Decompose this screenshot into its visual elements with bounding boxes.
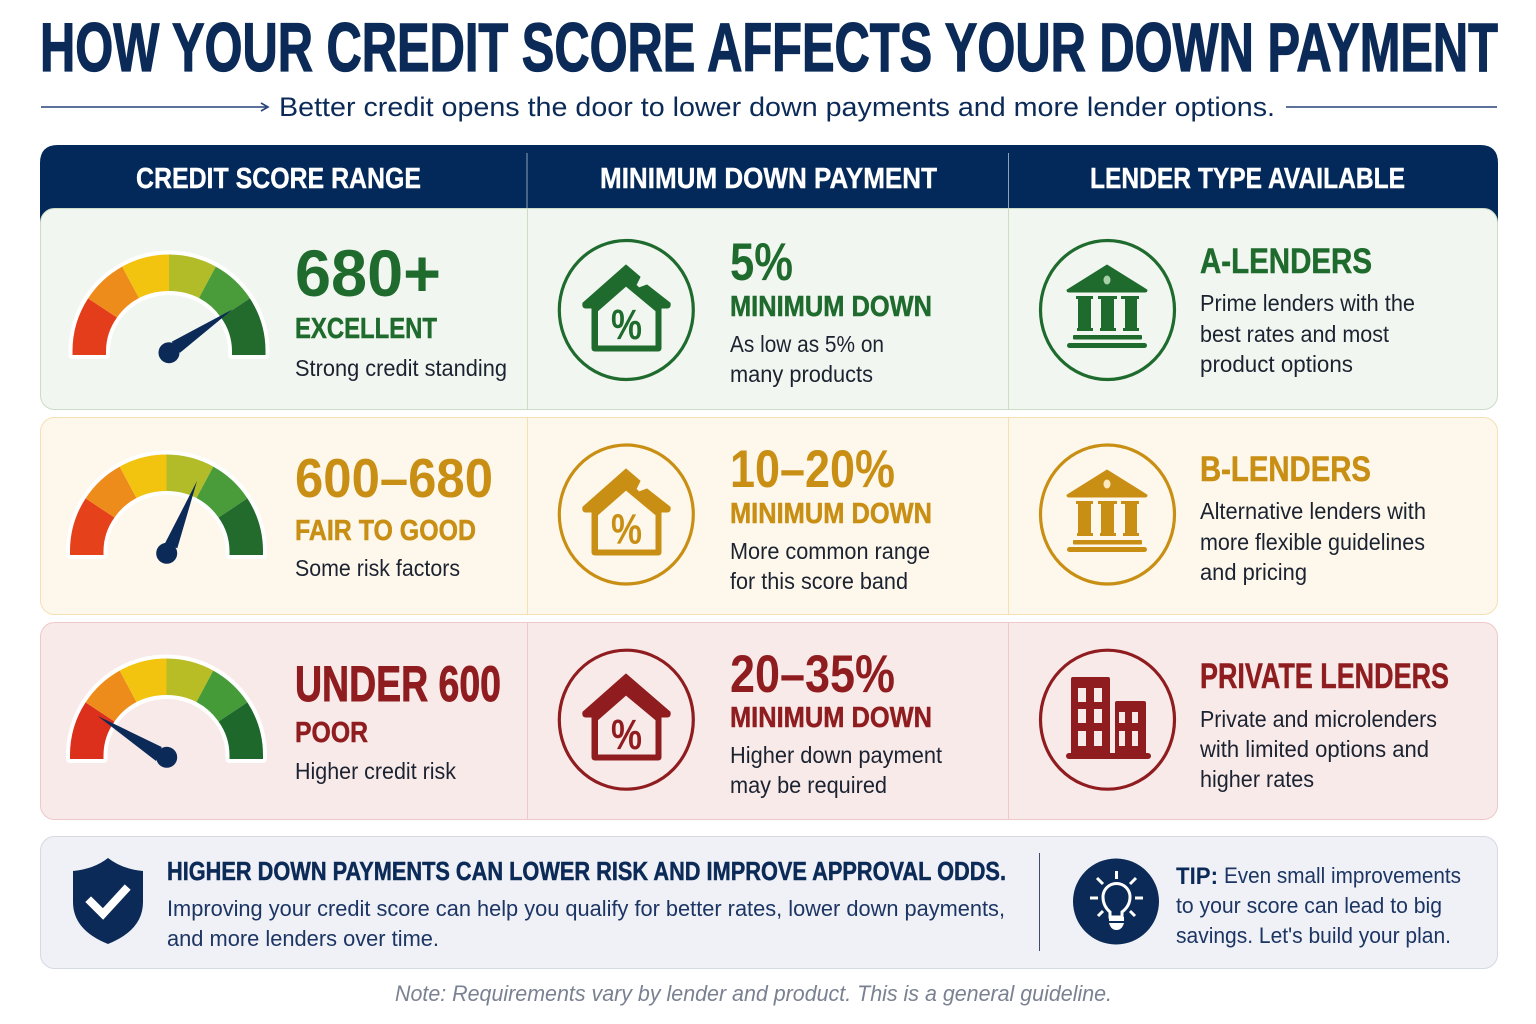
tip text: to your score can lead to big bbox=[1176, 893, 1442, 918]
down payment text: 10-20% bbox=[730, 440, 932, 594]
icon: shield check bbox=[73, 858, 143, 944]
lender text: B-lenders: Alternative lenders with bbox=[1200, 498, 1426, 524]
icon: bank green bbox=[1040, 240, 1174, 380]
table header bar: MINIMUM DOWN PAYMENT bbox=[600, 163, 937, 195]
icon: house percent red bbox=[559, 650, 693, 789]
down payment text: 5%: 5% bbox=[730, 233, 793, 292]
subtitle with arrow lines bbox=[41, 92, 1497, 122]
panel: row poor bbox=[40, 622, 1498, 820]
panel: row excellent bbox=[40, 208, 1498, 410]
icon: house percent green: % bbox=[611, 301, 642, 349]
tip text: Even small improvements bbox=[1224, 863, 1461, 888]
lender text: A-lenders: best rates and most bbox=[1200, 321, 1390, 347]
down payment text: 20-35%: may be required bbox=[730, 772, 887, 798]
lender text: A-lenders: product options bbox=[1200, 351, 1353, 377]
down payment text: 20-35% bbox=[730, 645, 943, 798]
icon: buildings red bbox=[1040, 650, 1174, 789]
score text: under 600: Higher credit risk bbox=[295, 758, 456, 784]
table header bar: CREDIT SCORE RANGE bbox=[136, 163, 421, 195]
lender text: private lenders bbox=[1199, 657, 1449, 792]
icon: house percent gold bbox=[559, 445, 693, 584]
panel: bottom callout bbox=[40, 836, 1498, 968]
callout text bbox=[167, 856, 1006, 951]
lender text: private lenders: with limited options and bbox=[1199, 736, 1429, 762]
score text: 680+: EXCELLENT bbox=[295, 313, 437, 345]
tip text: TIP: bbox=[1176, 863, 1218, 890]
down payment text: 20-35%: MINIMUM DOWN bbox=[730, 702, 932, 734]
icon: house percent green bbox=[559, 240, 693, 380]
score text: 600-680: Some risk factors bbox=[295, 555, 460, 581]
score text: under 600 bbox=[295, 656, 501, 784]
icon: light bulb bbox=[1073, 858, 1159, 944]
lender text: B-lenders: more flexible guidelines bbox=[1200, 529, 1425, 555]
icon: house percent gold: % bbox=[611, 506, 642, 554]
tip text bbox=[1176, 863, 1461, 948]
lender text: A-lenders bbox=[1200, 242, 1415, 377]
down payment text: 5%: many products bbox=[730, 361, 873, 387]
subtitle with arrow lines: Better credit opens the door to lower down payments and more lender options. bbox=[279, 92, 1275, 122]
score text: 600-680 bbox=[295, 447, 493, 581]
lender text: B-lenders: and pricing bbox=[1200, 559, 1307, 585]
down payment text: 10-20%: 10–20% bbox=[730, 440, 895, 499]
footnote: Note: Requirements vary by lender and product. This is a general guideline. bbox=[395, 981, 1112, 1006]
panel: row fair to good bbox=[40, 418, 1498, 614]
down payment text: 5% bbox=[730, 233, 932, 387]
score text: 600-680: FAIR TO GOOD bbox=[295, 515, 476, 547]
score text: under 600: UNDER 600 bbox=[295, 656, 501, 712]
callout text: Improving your credit score can help you qualify for better rates, lower down payments, bbox=[167, 896, 1005, 921]
lender text: B-lenders: B-LENDERS bbox=[1200, 450, 1371, 489]
gauge: excellent bbox=[72, 254, 266, 363]
table header bar bbox=[40, 145, 1498, 225]
down payment text: 10-20%: More common range bbox=[730, 538, 930, 564]
icon: bank gold bbox=[1040, 445, 1174, 584]
lender text: A-lenders: A-LENDERS bbox=[1200, 242, 1372, 281]
callout text: and more lenders over time. bbox=[167, 926, 439, 951]
table header bar: LENDER TYPE AVAILABLE bbox=[1090, 163, 1405, 195]
down payment text: 10-20%: MINIMUM DOWN bbox=[730, 498, 932, 530]
gauge: fair bbox=[70, 454, 263, 564]
lender text: private lenders: PRIVATE LENDERS bbox=[1200, 657, 1449, 696]
down payment text: 20-35%: Higher down payment bbox=[730, 742, 943, 768]
icon: house percent red: % bbox=[611, 711, 642, 759]
lender text: private lenders: Private and microlenders bbox=[1200, 706, 1437, 732]
down payment text: 5%: As low as 5% on bbox=[730, 331, 884, 357]
lender text: A-lenders: Prime lenders with the bbox=[1200, 290, 1415, 316]
score text: 680+: 680+ bbox=[295, 236, 441, 310]
score text: under 600: POOR bbox=[295, 717, 368, 749]
lender text: private lenders: higher rates bbox=[1200, 766, 1314, 792]
score text: 680+ bbox=[295, 236, 507, 381]
tip text: savings. Let's build your plan. bbox=[1176, 923, 1451, 948]
gauge: poor bbox=[70, 658, 263, 768]
down payment text: 20-35%: 20–35% bbox=[730, 645, 895, 704]
down payment text: 10-20%: for this score band bbox=[730, 568, 908, 594]
callout text: HIGHER DOWN PAYMENTS CAN LOWER RISK AND IMPROVE APPROVAL ODDS. bbox=[167, 856, 1006, 886]
lender text: B-lenders bbox=[1200, 450, 1426, 585]
score text: 680+: Strong credit standing bbox=[295, 355, 507, 381]
down payment text: 5%: MINIMUM DOWN bbox=[730, 291, 932, 323]
score text: 600-680: 600–680 bbox=[295, 447, 493, 509]
